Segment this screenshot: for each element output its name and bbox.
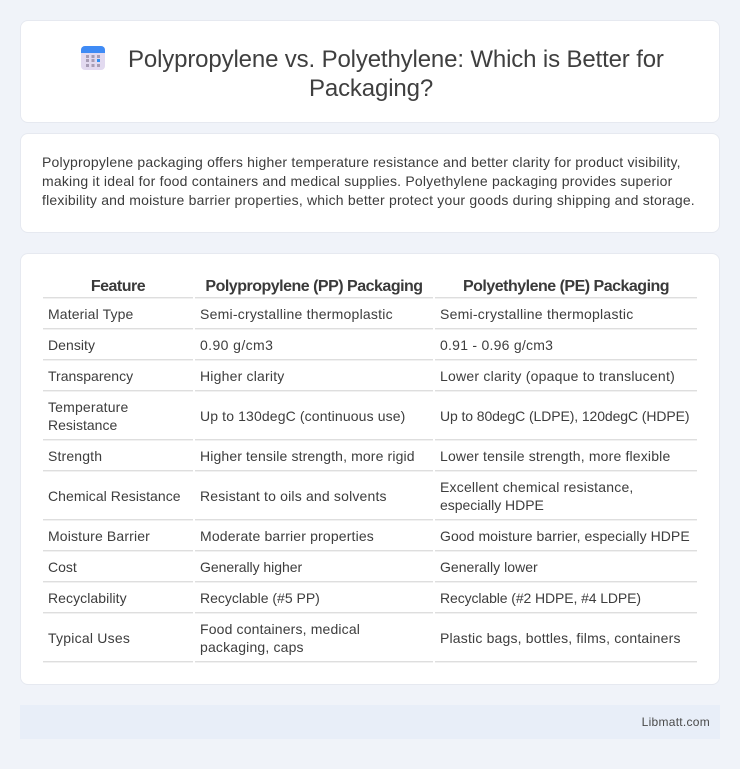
comparison table: packaging, caps: [200, 639, 304, 655]
comparison table: especially HDPE: [440, 497, 544, 513]
comparison table: Resistant to oils and solvents: [200, 488, 387, 504]
comparison table: Recyclability: [48, 590, 127, 606]
title: Packaging?: [309, 75, 433, 102]
comparison table: Material Type: [48, 306, 133, 322]
comparison table: Lower clarity (opaque to translucent): [440, 368, 675, 384]
comparison table: Recyclable (#2 HDPE, #4 LDPE): [440, 590, 641, 606]
comparison table: Generally higher: [200, 559, 302, 575]
comparison table: Typical Uses: [48, 630, 130, 646]
table card: [20, 253, 720, 685]
title: Polypropylene vs. Polyethylene: Which is Better for: [128, 46, 664, 73]
title card: [20, 20, 720, 123]
footer credit: Libmatt.com: [642, 715, 710, 729]
comparison table: Generally lower: [440, 559, 538, 575]
comparison table: 0.91 - 0.96 g/cm3: [440, 337, 553, 353]
icon: calendar: [81, 46, 105, 70]
intro text: Polypropylene packaging offers higher temperature resistance and better clarity for product visibility,: [42, 154, 681, 170]
comparison table: Temperature: [48, 399, 128, 415]
header row: Polypropylene (PP) Packaging: [205, 278, 423, 295]
title: [128, 46, 664, 102]
comparison table: Good moisture barrier, especially HDPE: [440, 528, 690, 544]
comparison table: Food containers, medical: [200, 621, 360, 637]
comparison table: [43, 278, 697, 663]
comparison table: Density: [48, 337, 95, 353]
comparison table: Excellent chemical resistance,: [440, 479, 634, 495]
header row: [91, 278, 669, 295]
comparison table: Moderate barrier properties: [200, 528, 374, 544]
comparison table: 0.90 g/cm3: [200, 337, 273, 353]
comparison table: Higher clarity: [200, 368, 284, 384]
comparison table: Semi-crystalline thermoplastic: [200, 306, 393, 322]
comparison table: Up to 80degC (LDPE), 120degC (HDPE): [440, 408, 689, 424]
comparison table: Higher tensile strength, more rigid: [200, 448, 415, 464]
footer bar: [20, 705, 720, 739]
comparison table: Semi-crystalline thermoplastic: [440, 306, 633, 322]
comparison table: Moisture Barrier: [48, 528, 150, 544]
comparison table: Recyclable (#5 PP): [200, 590, 320, 606]
header row: Polyethylene (PE) Packaging: [463, 278, 669, 295]
comparison table: Chemical Resistance: [48, 488, 181, 504]
comparison table: Cost: [48, 559, 77, 575]
comparison table: Resistance: [48, 417, 117, 433]
intro text: [42, 154, 695, 208]
comparison table: Strength: [48, 448, 102, 464]
header row: Feature: [91, 278, 145, 295]
intro card: [20, 133, 720, 233]
intro text: making it ideal for food containers and medical supplies. Polyethylene packaging provides superior: [42, 173, 673, 189]
comparison table: Up to 130degC (continuous use): [200, 408, 405, 424]
intro text: flexibility and moisture barrier properties, which better protect your goods during shipping and storage.: [42, 192, 695, 208]
comparison table: Lower tensile strength, more flexible: [440, 448, 670, 464]
comparison table: Plastic bags, bottles, films, containers: [440, 630, 681, 646]
comparison table: Transparency: [48, 368, 133, 384]
